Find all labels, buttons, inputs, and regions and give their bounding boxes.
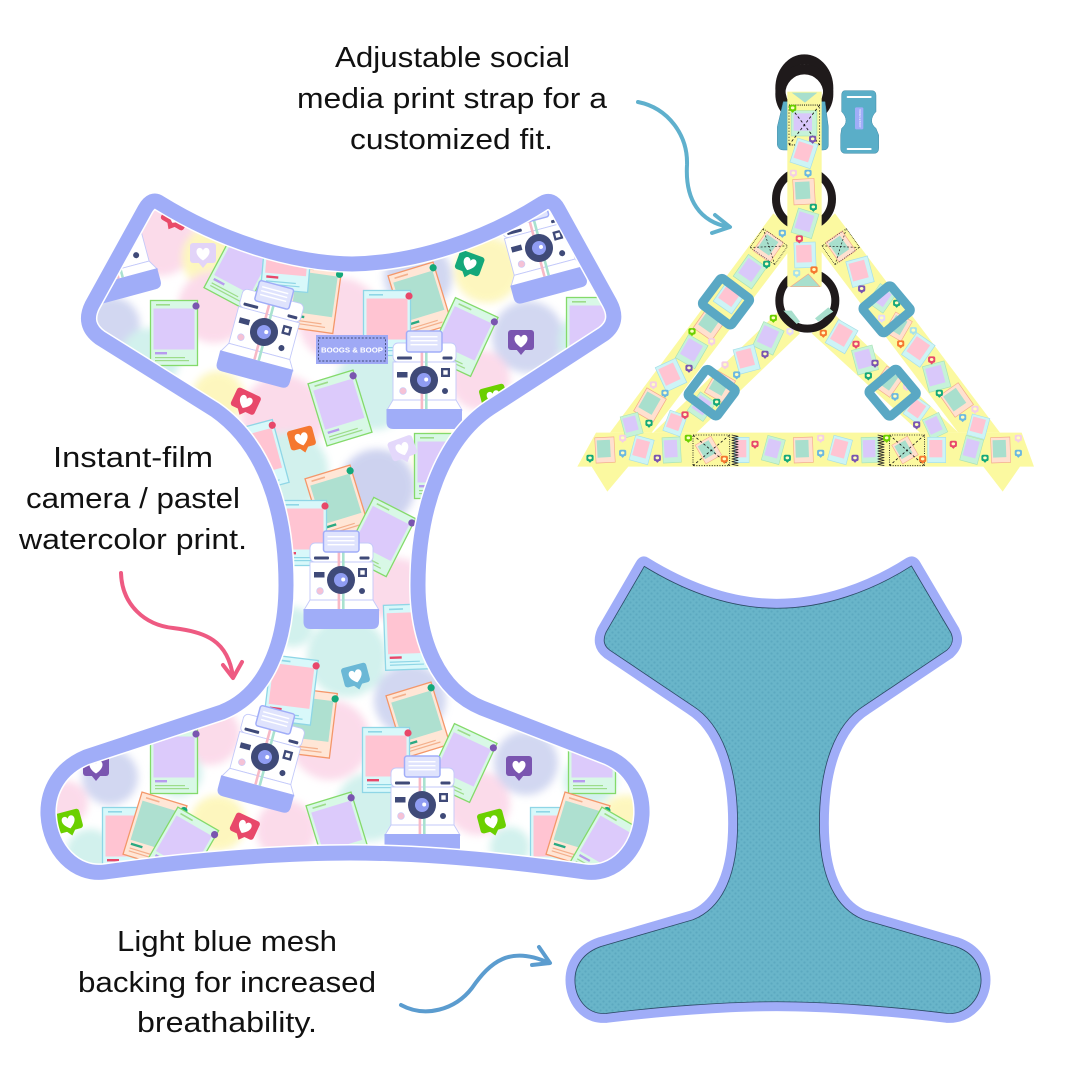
periwinkle binding	[570, 561, 986, 1018]
like-heart speech bubbles	[53, 201, 534, 845]
watercolor blobs	[44, 204, 654, 877]
arrow: pink arrow pointing to print	[121, 573, 242, 678]
caption: instant-film camera print: camera / pastel	[26, 483, 240, 515]
chest strap print: mini frames	[595, 435, 1011, 466]
right inner strap	[812, 310, 958, 433]
left outer strap	[610, 213, 800, 433]
separate buckle clip: BOOGS & BOOP	[858, 109, 860, 128]
vertical centre strap	[787, 92, 822, 287]
caption: instant-film camera print: Instant-film	[53, 442, 213, 474]
woven brand label	[316, 335, 388, 364]
horizontal chest strap with tails	[577, 433, 1034, 492]
mesh dot texture	[574, 566, 982, 1014]
strap harness illustration	[577, 59, 1034, 492]
buckle clip behind strap	[777, 102, 828, 150]
centre strap print	[789, 93, 820, 287]
caption: adjustable social media print strap: customized fit.	[350, 124, 553, 156]
mesh harness, reverse side	[560, 550, 1000, 1030]
left harness, printed side	[30, 190, 660, 890]
upper stitched squares on side straps	[750, 229, 860, 265]
caption: instant-film camera print	[18, 442, 247, 556]
caption: adjustable social media print strap	[297, 42, 608, 156]
periwinkle binding around harness	[48, 201, 642, 872]
strap print: mini frames	[620, 254, 990, 440]
left inner strap	[653, 310, 800, 433]
right outer strap	[810, 213, 1000, 433]
caption: light blue mesh backing: backing for increased	[78, 967, 376, 999]
instant photo frames	[102, 224, 644, 888]
caption: adjustable social media print strap: media print strap for a	[297, 83, 608, 115]
arrow: blue arrow pointing to mesh	[401, 947, 550, 1011]
caption: light blue mesh backing: breathability.	[137, 1007, 317, 1039]
square adjuster buckles	[687, 277, 917, 417]
D-rings at top of strap	[780, 59, 828, 119]
instant cameras	[64, 191, 588, 854]
print pattern clipped to harness shape	[56, 210, 633, 864]
strap print: mini hearts	[586, 230, 1022, 464]
caption: adjustable social media print strap: Adjustable social	[335, 42, 570, 74]
woven brand label: BOOGS & BOOP	[321, 346, 383, 354]
upper O-ring	[776, 171, 832, 227]
arrow: teal arrow pointing to strap harness	[638, 102, 730, 233]
caption: light blue mesh backing	[78, 926, 376, 1039]
mesh fill	[570, 561, 986, 1018]
separate buckle clip	[841, 91, 879, 153]
strap ends visible inside lower ring	[783, 307, 833, 324]
caption: instant-film camera print: watercolor print.	[18, 524, 247, 556]
caption: light blue mesh backing: Light blue mesh	[117, 926, 337, 958]
lower O-ring	[779, 273, 835, 329]
